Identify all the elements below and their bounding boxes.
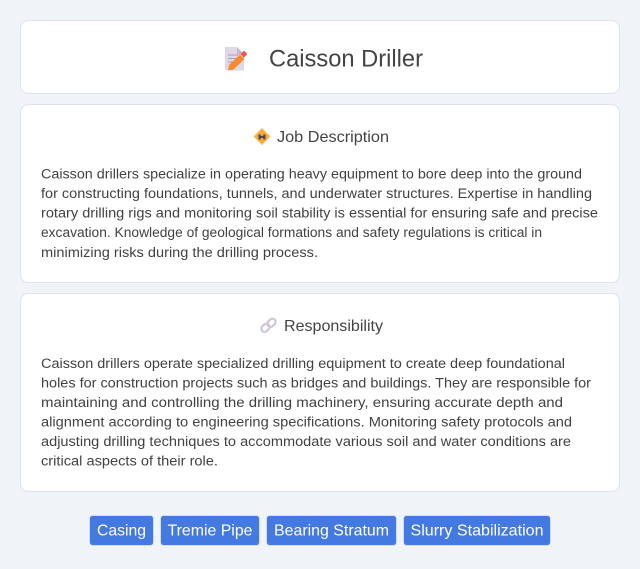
tag: casing: Casing — [97, 522, 146, 540]
text: job description body: Caisson drillers specialize in operating heavy equipment to bore deep into the ground — [41, 166, 582, 182]
tag: slurry stabilization — [404, 516, 550, 546]
title: Caisson Driller — [269, 46, 423, 72]
heading: job description: Job Description — [277, 129, 389, 146]
text: responsibility body: maintaining and controlling the drilling machinery, ensuring accurate depth and — [41, 395, 563, 411]
panel: title header — [20, 20, 620, 94]
tag: tremie pipe — [160, 516, 260, 546]
text: responsibility body: alignment according to engineering specifications. Monitoring safety protocols and — [41, 414, 572, 430]
icon: construction diamond — [254, 128, 270, 144]
panel: job description — [20, 104, 620, 282]
icon: chain link — [260, 317, 277, 333]
tag: slurry stabilization: Slurry Stabilization — [410, 522, 544, 540]
text: responsibility body: Caisson drillers operate specialized drilling equipment to create deep foundational — [41, 356, 565, 372]
text: job description body: for constructing foundations, tunnels, and underwater structures. Expertise in handling — [41, 186, 592, 202]
panel: responsibility — [20, 294, 620, 492]
text: responsibility body: adjusting drilling techniques to accommodate various soil and water conditions are — [41, 434, 571, 450]
icon: document with pencil — [225, 47, 247, 70]
text: job description body: excavation. Knowledge of geological formations and safety regulations is critical in — [41, 225, 542, 241]
text: responsibility body — [41, 356, 591, 470]
text: responsibility body: critical aspects of their role. — [41, 454, 218, 470]
tag: casing — [90, 516, 154, 546]
text: responsibility body: holes for construction projects such as bridges and buildings. They are responsible for — [41, 376, 591, 392]
text: job description body: minimizing risks during the drilling process. — [41, 245, 318, 261]
tag: tremie pipe: Tremie Pipe — [168, 522, 253, 540]
tag: bearing stratum — [266, 516, 396, 546]
text: job description body: rotary drilling rigs and monitoring soil stability is essential for ensuring safe and precise — [41, 206, 598, 222]
heading: responsibility: Responsibility — [284, 318, 383, 335]
text: job description body — [41, 166, 598, 261]
tag: bearing stratum: Bearing Stratum — [274, 522, 389, 540]
tags row — [90, 516, 550, 546]
